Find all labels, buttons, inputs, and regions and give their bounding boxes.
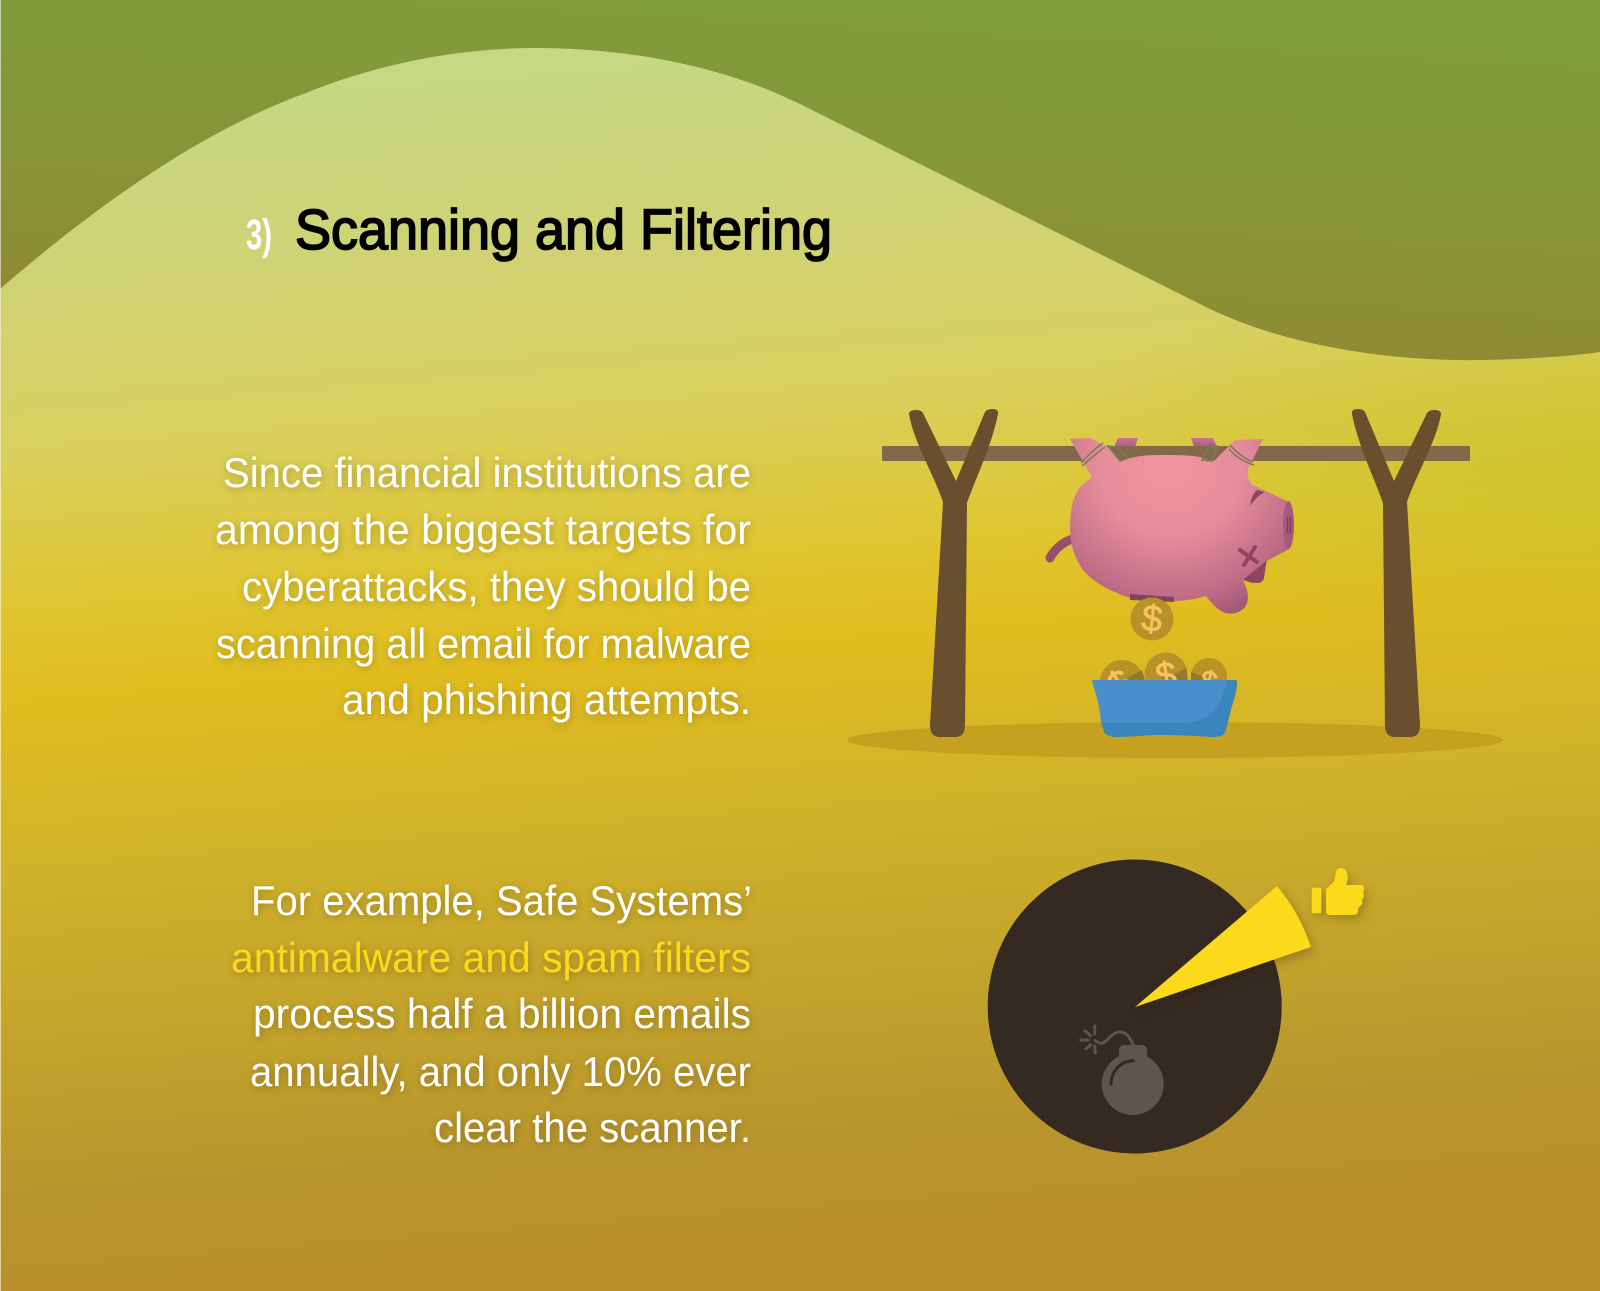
pig crossed-out eye: [1240, 547, 1257, 565]
icon: thumbs up: [1312, 868, 1364, 915]
pole: [882, 446, 1470, 461]
text block: Safe Systems example: clear the scanner.: [434, 1104, 751, 1151]
text block: financial institutions: and phishing attempts.: [342, 676, 751, 723]
radar disc: [988, 860, 1282, 1154]
text block: financial institutions: [215, 449, 751, 723]
heading: [246, 198, 832, 262]
pig back leg: [1240, 558, 1267, 583]
pig nostrils: [1288, 517, 1290, 533]
pig tail: [1050, 539, 1073, 558]
coins in the bowl: $: [1100, 661, 1140, 706]
section number: 3): [246, 211, 272, 259]
far ears: [1114, 438, 1217, 447]
text block: financial institutions: cyberattacks, they should be: [242, 563, 751, 610]
text block: Safe Systems example: For example, Safe Systems’: [251, 877, 752, 924]
text block: financial institutions: Since financial institutions are: [223, 449, 751, 496]
coins in the bowl: $: [1153, 654, 1179, 697]
ropes: [1081, 443, 1254, 466]
scanner beam: [1135, 886, 1311, 1007]
coin slot: [1130, 594, 1174, 602]
text block: financial institutions: among the biggest targets for: [215, 506, 751, 553]
icon: bomb: [1081, 1026, 1164, 1115]
pig body: [1070, 438, 1289, 614]
text block: Safe Systems example: annually, and only 10% ever: [250, 1048, 751, 1095]
illustration: piggy bank on a spit: [847, 409, 1503, 758]
pig near ear fold: [1250, 490, 1265, 506]
top wave band: [0, 0, 1600, 360]
text block: Safe Systems example: antimalware and spam filters: [231, 934, 751, 981]
text block: Safe Systems example: process half a billion emails: [253, 990, 751, 1037]
text block: Safe Systems example: [231, 877, 752, 1151]
ground shadow: [847, 722, 1503, 758]
pig snout end: [1283, 501, 1294, 549]
falling coin: $: [1140, 597, 1164, 640]
falling coin: [1130, 597, 1174, 640]
text block: financial institutions: scanning all email for malware: [216, 620, 751, 667]
coins in the bowl: $: [1196, 664, 1221, 701]
section title: Scanning and Filtering: [295, 198, 832, 262]
coins in the bowl: [1100, 652, 1227, 680]
blue bowl: [1092, 680, 1237, 737]
illustration: email scanner radar: [988, 860, 1364, 1154]
right post: [1352, 409, 1441, 737]
left post: [909, 409, 998, 737]
